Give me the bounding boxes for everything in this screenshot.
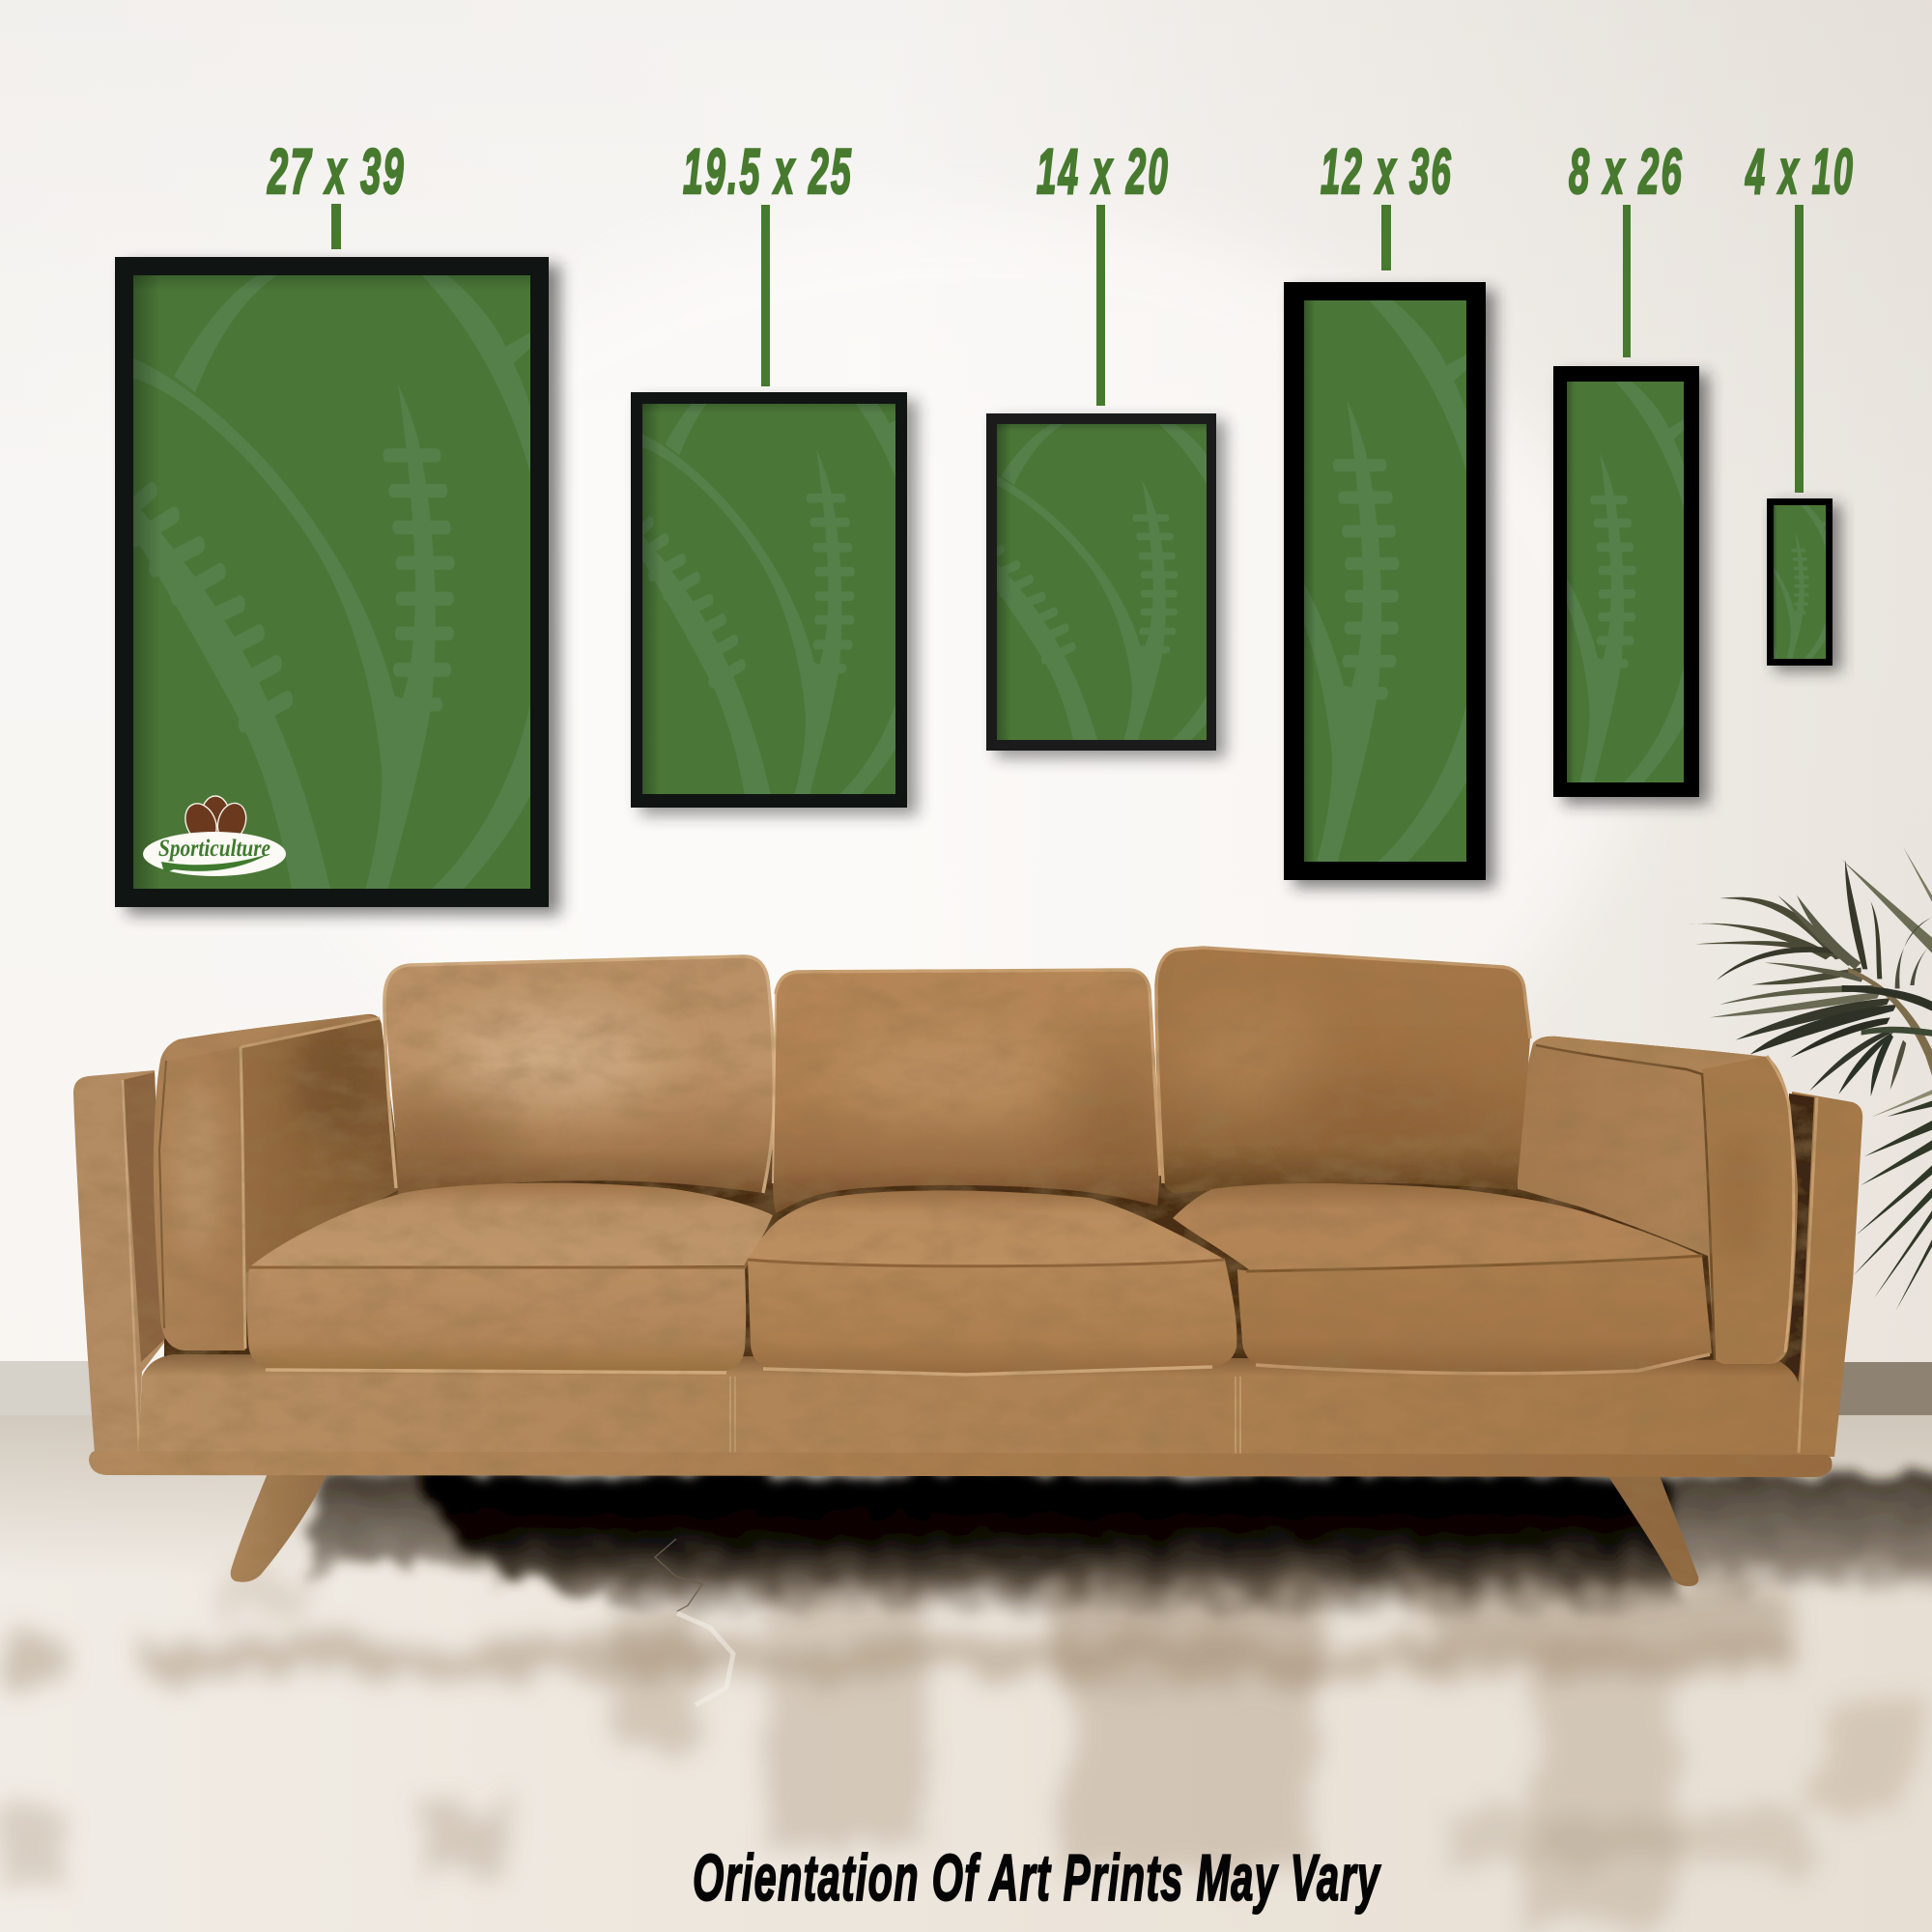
tick: 8 x 26 [1623, 205, 1631, 357]
logo swoosh [161, 854, 269, 873]
apron panel [138, 1354, 1800, 1456]
framed print: 8 x 26 [1431, 366, 1709, 805]
baseboard [0, 1361, 1932, 1416]
tick: 14 x 20 [1096, 205, 1105, 406]
footnote: Orientation Of Art Prints May Vary [693, 1841, 1381, 1915]
tick: 12 x 36 [1381, 205, 1391, 270]
sofa leg: right [1606, 1473, 1698, 1586]
size label: 19.5 x 25: 19.5 x 25 [683, 135, 853, 207]
arm pillow: left [154, 1014, 406, 1350]
floor stains [0, 1570, 1913, 1922]
concrete floor [0, 1415, 1932, 1932]
size label: 27 x 39: 27 x 39 [267, 135, 406, 207]
seat cushion: left [247, 1182, 773, 1373]
back cushion: left [357, 956, 774, 1198]
leather sofa [73, 948, 1862, 1586]
seat cushion: right [1173, 1183, 1712, 1374]
outer arm: right [1785, 1092, 1862, 1457]
blurred upper fronds [1688, 847, 1932, 1096]
tick: 19.5 x 25 [761, 205, 770, 386]
outer arm: left [73, 1070, 166, 1454]
framed print: 19.5 x 25 [631, 375, 918, 815]
framed print: 12 x 36 [1102, 282, 1495, 888]
framed print: 4 x 10 [1729, 498, 1841, 671]
seat cushion: center [748, 1190, 1236, 1375]
sofa leg: left [231, 1473, 327, 1582]
logo ellipse [143, 832, 286, 876]
sofa inner body [164, 1140, 1787, 1459]
arm pillow: right [1517, 1036, 1798, 1364]
tick: 4 x 10 [1795, 205, 1804, 493]
base rail [89, 1451, 1832, 1477]
back cushion: right [1156, 948, 1530, 1194]
potted palm fronds [1688, 847, 1932, 1311]
logo beans [180, 796, 250, 847]
lower sharp leaflets [1853, 1089, 1932, 1311]
floor crack [655, 1539, 733, 1705]
sofa shadow on floor [309, 1473, 1932, 1633]
logo wordmark: Sporticulture [158, 836, 270, 862]
logo: Sporticulture [143, 796, 286, 876]
wall background [0, 0, 1932, 1420]
tick: 27 x 39 [331, 204, 341, 249]
size label: 8 x 26: 8 x 26 [1569, 135, 1684, 207]
framed print: 14 x 20 [976, 413, 1226, 758]
size label: 12 x 36: 12 x 36 [1321, 135, 1453, 207]
framed print: 27 x 39 [115, 257, 560, 915]
size label: 14 x 20: 14 x 20 [1037, 135, 1170, 207]
back cushion: center [773, 970, 1169, 1213]
